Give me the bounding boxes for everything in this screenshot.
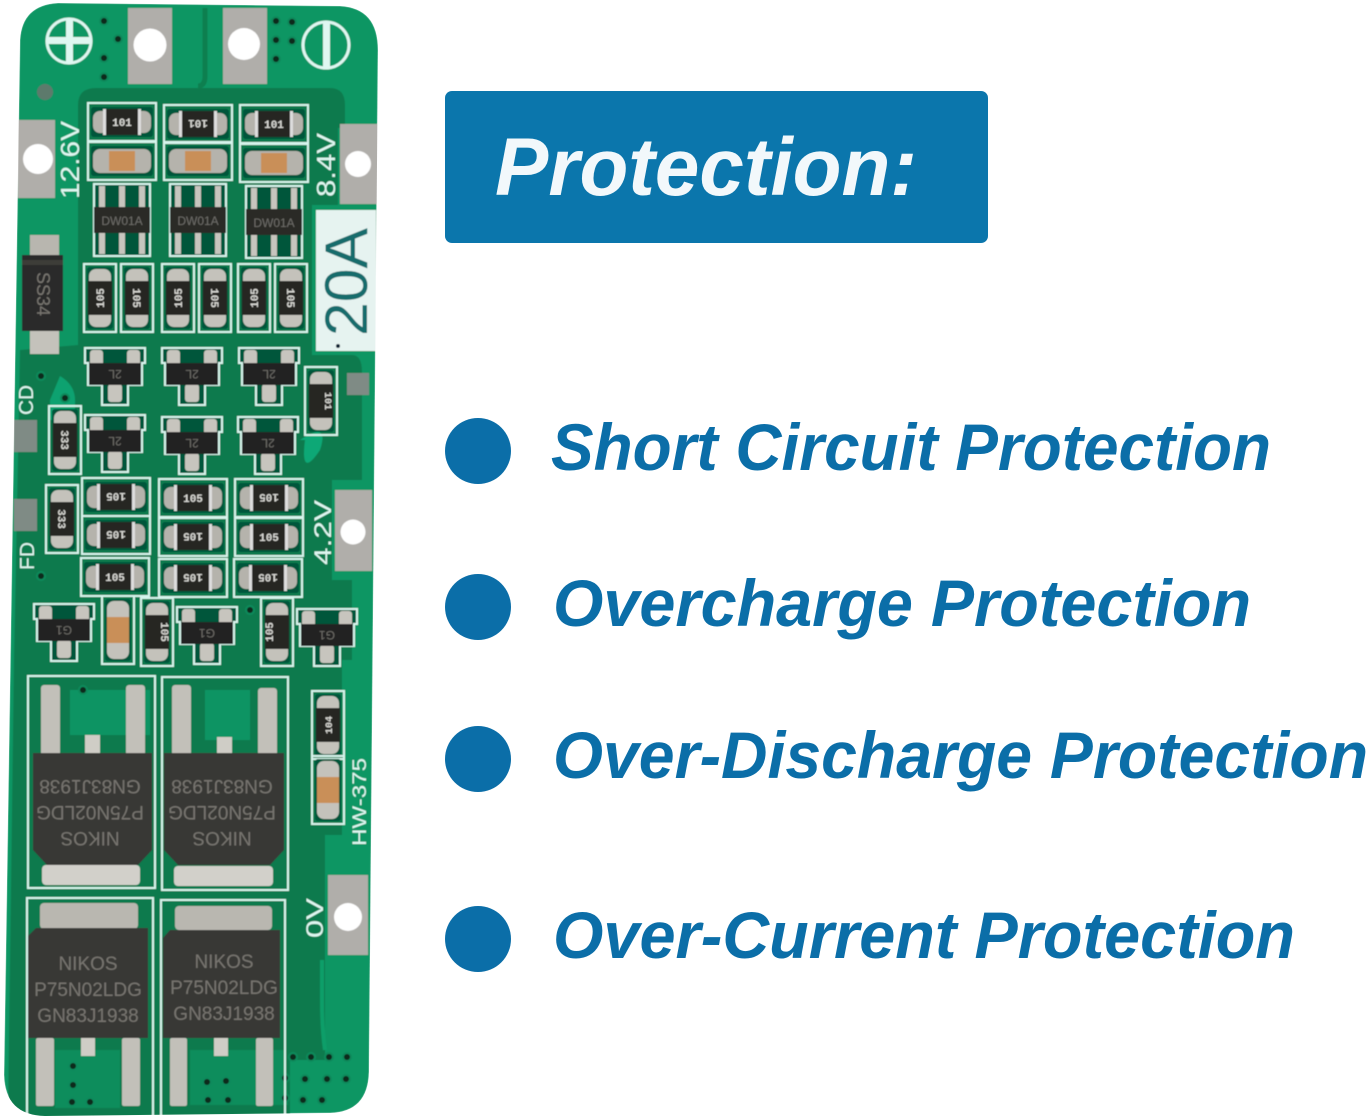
row: 2L transistors upper (85, 348, 299, 405)
row: 2L transistors upper: 2L (262, 367, 276, 381)
row: 2L transistors lower (85, 415, 298, 474)
grid: 105 horizontal resistors (81, 478, 303, 597)
component: SS34 diode: SS34 (33, 272, 53, 316)
component: MOSFET lower right: GN83J1938 (173, 1004, 275, 1025)
component: MOSFET lower right (163, 906, 280, 1106)
solder pads with mounting holes (14, 8, 378, 955)
row: 2L transistors upper: 2L (108, 367, 122, 381)
grid: 105 horizontal resistors: 105 (105, 573, 125, 585)
component: MOSFET lower left: P75N02LDG (34, 980, 142, 1001)
icon: minus terminal symbol (303, 22, 349, 68)
components: 104 resistor and capacitor: 104 (325, 716, 336, 734)
board substrate (4, 3, 378, 1116)
components: 104 resistor and capacitor (312, 691, 344, 824)
row: vertical 105 resistors: 105 (129, 288, 141, 308)
grid: 105 horizontal resistors: 105 (259, 490, 279, 502)
bullet (445, 906, 511, 972)
row: DW01A protection ICs (94, 184, 302, 258)
row: DW01A protection ICs: DW01A (253, 216, 295, 230)
row: vertical capacitor and 105 resistors: 105 (157, 622, 169, 642)
components: 333 resistors: 333 (54, 509, 66, 529)
row: vertical 105 resistors: 105 (96, 288, 108, 308)
grid: 105 horizontal resistors: 105 (183, 494, 203, 506)
row: DW01A protection ICs: DW01A (177, 214, 219, 228)
item text: Over-Current Protection (553, 898, 1295, 972)
component: MOSFET upper left: NIKOS (60, 827, 120, 848)
component: MOSFET upper left: P75N02LDG (36, 801, 144, 822)
silkscreen labels (16, 120, 371, 938)
component: MOSFET lower right: P75N02LDG (170, 978, 278, 999)
row: 2L transistors lower: 2L (108, 434, 122, 448)
silkscreen labels: HW-375 (350, 758, 371, 846)
silkscreen labels: 4.2V (310, 500, 337, 565)
silk frames around MOSFETs (27, 676, 288, 1120)
bullet (445, 726, 511, 792)
row: top 101 resistors: 101 (264, 120, 284, 132)
components: 333 resistors (46, 406, 81, 553)
row: DW01A protection ICs: DW01A (101, 214, 143, 228)
row: top 101 resistors (88, 103, 308, 143)
silkscreen labels: 0V (302, 898, 329, 938)
row: G1 transistors: G1 (319, 628, 335, 642)
grid: 105 horizontal resistors: 105 (183, 570, 203, 582)
silkscreen labels: 8.4V (311, 132, 341, 197)
grid: 105 horizontal resistors: 105 (258, 570, 278, 582)
component: MOSFET upper right: P75N02LDG (168, 801, 276, 822)
bullet (445, 418, 511, 484)
banner background (445, 91, 988, 243)
item text: Overcharge Protection (553, 566, 1251, 640)
row: vertical capacitor and 105 resistors: 105 (265, 622, 277, 642)
row: G1 transistors (34, 604, 357, 666)
row: top 101 resistors: 101 (112, 118, 132, 130)
row: top capacitors (88, 142, 308, 182)
copper trace regions (8, 8, 362, 1118)
bullet (445, 574, 511, 640)
component: MOSFET upper right: NIKOS (192, 827, 252, 848)
grid: 105 horizontal resistors: 105 (183, 529, 203, 541)
row: 2L transistors lower: 2L (185, 436, 199, 450)
component: MOSFET lower left: NIKOS (58, 954, 118, 975)
item text: Short Circuit Protection (551, 410, 1271, 484)
grid: 105 horizontal resistors: 105 (259, 533, 279, 545)
panel: Protection banner (445, 91, 988, 243)
row: vertical 105 resistors: 105 (250, 288, 262, 308)
components: 333 resistors: 333 (57, 430, 69, 450)
component: vertical 101 resistor (305, 367, 337, 435)
component: SS34 diode (22, 235, 63, 354)
label: 20A rating: 20A (313, 228, 380, 336)
component: MOSFET upper left (33, 685, 152, 885)
component: MOSFET upper left: GN83J1938 (39, 775, 141, 796)
row: top 101 resistors: 101 (188, 116, 208, 128)
panel: PCB board photo (4, 3, 380, 1120)
row: vertical capacitor and 105 resistors (102, 596, 293, 666)
row: vertical 105 resistors (84, 264, 307, 332)
row: 2L transistors upper: 2L (185, 367, 199, 381)
component: MOSFET lower left (28, 903, 148, 1106)
list item: over-discharge (445, 718, 1368, 792)
component: MOSFET upper right: GN83J1938 (171, 775, 273, 796)
component: MOSFET lower left: GN83J1938 (37, 1006, 139, 1027)
component: MOSFET lower right: NIKOS (194, 952, 254, 973)
component: vertical 101 resistor: 101 (321, 392, 332, 410)
list item: overcharge (445, 566, 1251, 640)
silkscreen labels: CD (16, 385, 38, 415)
heading: Protection: (495, 122, 917, 213)
row: 2L transistors lower: 2L (261, 436, 275, 450)
component: MOSFET upper right (164, 685, 284, 886)
silkscreen labels: FD (17, 542, 39, 570)
grid: 105 horizontal resistors: 105 (106, 489, 126, 501)
row: vertical 105 resistors: 105 (207, 288, 219, 308)
silkscreen labels: 12.6V (55, 120, 85, 199)
item text: Over-Discharge Protection (553, 718, 1368, 792)
row: vertical 105 resistors: 105 (283, 288, 295, 308)
list item: short circuit (445, 410, 1271, 484)
row: vertical 105 resistors: 105 (174, 288, 186, 308)
list item: over-current (445, 898, 1295, 972)
icon: plus terminal symbol (47, 19, 91, 63)
grid: 105 horizontal resistors: 105 (106, 527, 126, 539)
row: G1 transistors: G1 (199, 626, 215, 640)
row: G1 transistors: G1 (56, 623, 72, 637)
vias (36, 16, 352, 1107)
